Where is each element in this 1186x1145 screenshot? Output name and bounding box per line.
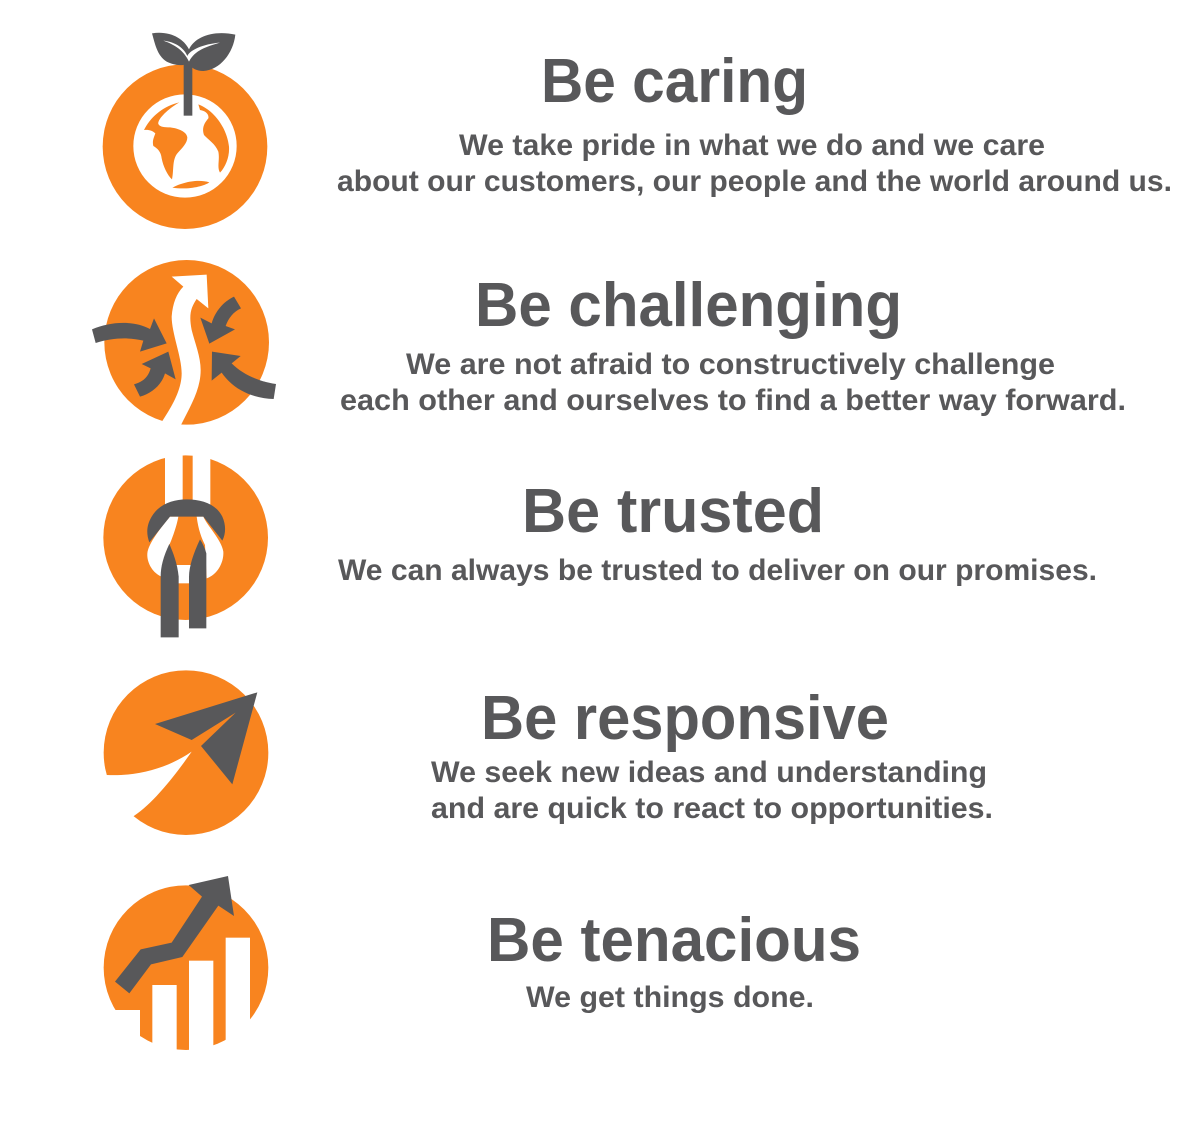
icon: converging arrows and winding path xyxy=(92,260,276,437)
text: Be caring description xyxy=(337,129,1172,198)
text: Be responsive description xyxy=(431,756,993,825)
heading: Be caring: Be caring xyxy=(541,47,808,116)
icon: paper plane xyxy=(90,670,268,835)
heading: Be responsive: Be responsive xyxy=(481,684,889,753)
text: Be caring description: We take pride in what we do and we care xyxy=(459,129,1045,162)
heading: Be tenacious: Be tenacious xyxy=(487,906,861,975)
text: Be tenacious description: We get things done. xyxy=(526,981,814,1014)
text: Be caring description: about our customers, our people and the world around us. xyxy=(337,165,1172,198)
text: Be challenging description: each other and ourselves to find a better way forward. xyxy=(340,384,1126,417)
icon: knot xyxy=(103,450,268,637)
text: Be responsive description: We seek new ideas and understanding xyxy=(431,756,987,789)
text: Be challenging description: We are not afraid to constructively challenge xyxy=(406,348,1055,381)
text: Be trusted description: We can always be trusted to deliver on our promises. xyxy=(338,554,1097,587)
heading: Be trusted: Be trusted xyxy=(522,477,824,546)
text: Be responsive description: and are quick to react to opportunities. xyxy=(431,792,993,825)
icon: seedling growing from globe xyxy=(103,33,267,229)
icon: rising bar chart with arrow xyxy=(97,876,268,1057)
heading: Be challenging: Be challenging xyxy=(475,271,902,340)
text: Be challenging description xyxy=(340,348,1126,417)
